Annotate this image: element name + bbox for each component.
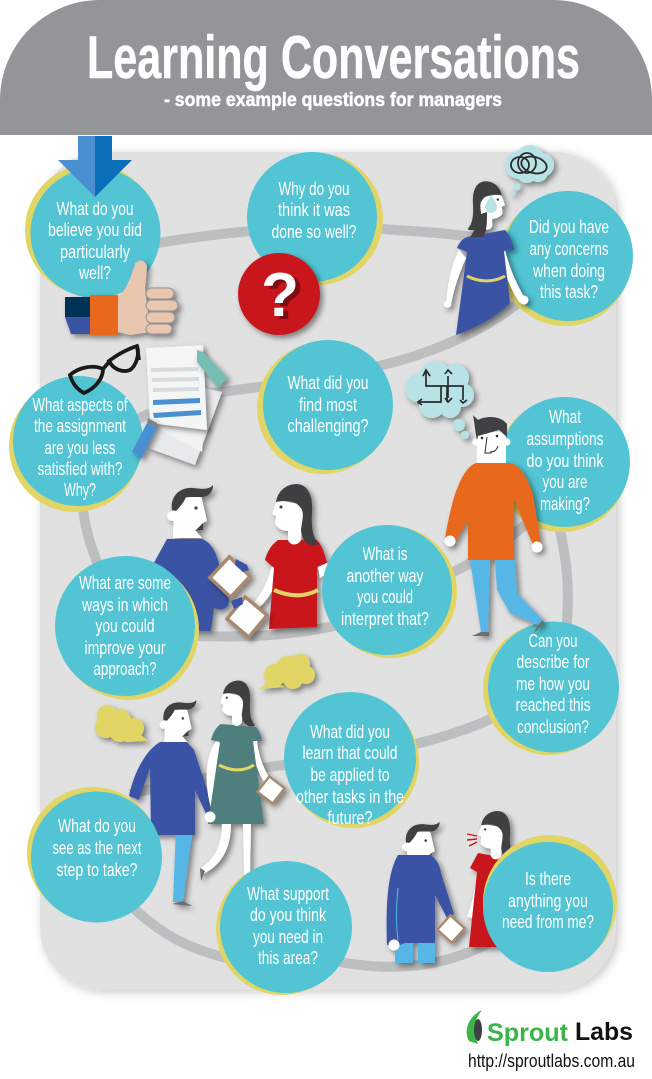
question bubble: what support: [216, 861, 352, 995]
question bubble: less satisfied: satisfied with?: [38, 459, 122, 479]
question bubble: describe conclusion: reached this: [516, 695, 590, 715]
question bubble: describe conclusion: me how you: [516, 674, 590, 694]
question bubble: challenging: [257, 340, 393, 474]
speech cloud: left: [95, 705, 148, 742]
question bubble: describe conclusion: conclusion?: [517, 717, 589, 737]
question bubble: interpret: another way: [346, 566, 424, 586]
question bubble: what did you learn: be applied to: [310, 765, 390, 785]
question bubble: challenging: challenging?: [288, 416, 368, 436]
logo: Sprout Labs: Sprout: [487, 1019, 569, 1047]
question bubble: what did you learn: learn that could: [302, 743, 398, 763]
question bubble: challenging: What did you: [288, 373, 368, 393]
question bubble: what do you believe: believe you did: [48, 220, 142, 240]
question bubble: concerns: [499, 191, 633, 326]
question bubble: assumptions: making?: [540, 494, 590, 514]
figure: man in orange with thought cloud: [405, 361, 544, 636]
question bubble: what did you learn: future?: [328, 808, 372, 828]
question bubble: interpret: you could: [357, 587, 413, 607]
question bubble: next step: see as the next: [52, 838, 142, 858]
question bubble: what support: do you think: [250, 905, 327, 925]
icon: glasses: [70, 346, 139, 393]
question bubble: less satisfied: are you less: [44, 438, 116, 458]
figure: couple walking: [129, 680, 286, 906]
icon: question mark ball: ?: [261, 261, 299, 330]
question bubble: why do you think: Why do you: [278, 179, 350, 199]
question bubble: interpret: [322, 525, 457, 658]
question bubble: what support: this area?: [258, 948, 318, 968]
question bubble: next step: What do you: [58, 816, 136, 836]
logo: Sprout Labs: [467, 1010, 633, 1047]
question bubble: what do you believe: particularly: [60, 242, 130, 262]
question bubble: improve approach: ways in which: [81, 595, 168, 615]
question bubble: concerns: when doing: [532, 261, 605, 281]
question bubble: anything from me: anything you: [508, 891, 588, 911]
grey background panel: [40, 152, 616, 990]
question bubble: anything from me: need from me?: [502, 912, 594, 932]
figure: man and woman talking: [387, 811, 516, 963]
icon: question mark ball: ?: [266, 264, 304, 333]
question bubble: less satisfied: [9, 376, 143, 512]
question bubble: why do you think: think it was: [278, 200, 350, 220]
figure: worried woman: [444, 181, 528, 335]
icon: tangled thought cloud: [505, 145, 554, 196]
question bubble: why do you think: done so well?: [272, 222, 356, 242]
question bubble: improve approach: [55, 556, 199, 700]
question bubble: assumptions: [496, 397, 630, 532]
question bubble: what support: What support: [247, 884, 329, 904]
question bubble: concerns: Did you have: [529, 217, 609, 237]
question bubble: concerns: this task?: [540, 282, 598, 302]
question bubble: what do you believe: What do you: [56, 199, 134, 219]
question bubble: what do you believe: well?: [78, 263, 111, 283]
question bubble: next step: [27, 787, 162, 922]
header banner: [0, 0, 652, 135]
question bubble: improve approach: you could: [96, 616, 154, 636]
logo: Sprout Labs: Labs: [575, 1018, 633, 1046]
question bubble: what did you learn: [284, 692, 419, 828]
icon: thumbs up hand: [65, 261, 178, 335]
question bubble: concerns: any concerns: [530, 239, 608, 259]
winding conversation path: [82, 228, 568, 967]
question bubble: less satisfied: Why?: [64, 480, 96, 500]
question bubble: describe conclusion: [483, 622, 619, 755]
figure: man and woman with clipboards: [150, 484, 330, 631]
question bubble: next step: step to take?: [56, 860, 138, 880]
question bubble: describe conclusion: Can you: [528, 631, 578, 651]
question bubble: assumptions: do you think: [526, 451, 604, 471]
question bubble: assumptions: you are: [542, 472, 588, 492]
question bubble: improve approach: approach?: [94, 659, 156, 679]
speech cloud: upper right: [259, 654, 315, 689]
question bubble: less satisfied: What aspects of: [32, 395, 128, 415]
question bubble: what support: you need in: [253, 927, 323, 947]
question bubble: challenging: find most: [299, 395, 357, 415]
clipboards held by man and woman: [207, 554, 270, 640]
question bubble: what did you learn: What did you: [310, 722, 390, 742]
question bubble: what do you believe: [25, 164, 160, 298]
question bubble: why do you think: [247, 152, 383, 285]
question bubble: anything from me: Is there: [525, 869, 571, 889]
subtitle: - some example questions for managers: [164, 90, 502, 111]
question bubble: anything from me: [483, 835, 617, 972]
question bubble: assumptions: What: [549, 407, 581, 427]
question bubble: assumptions: assumptions: [526, 429, 604, 449]
icon: blue down arrow: [58, 136, 132, 197]
question bubble: improve approach: improve your: [84, 638, 166, 658]
icon: question mark ball: [238, 253, 320, 335]
question bubble: interpret: interpret that?: [341, 609, 429, 629]
question bubble: less satisfied: the assignment: [34, 416, 126, 436]
question bubble: describe conclusion: describe for: [516, 652, 590, 672]
question bubble: what did you learn: other tasks in the: [296, 787, 404, 807]
icon: papers and highlighters: [132, 345, 228, 465]
question bubble: improve approach: What are some: [79, 573, 171, 593]
question bubble: interpret: What is: [362, 544, 408, 564]
